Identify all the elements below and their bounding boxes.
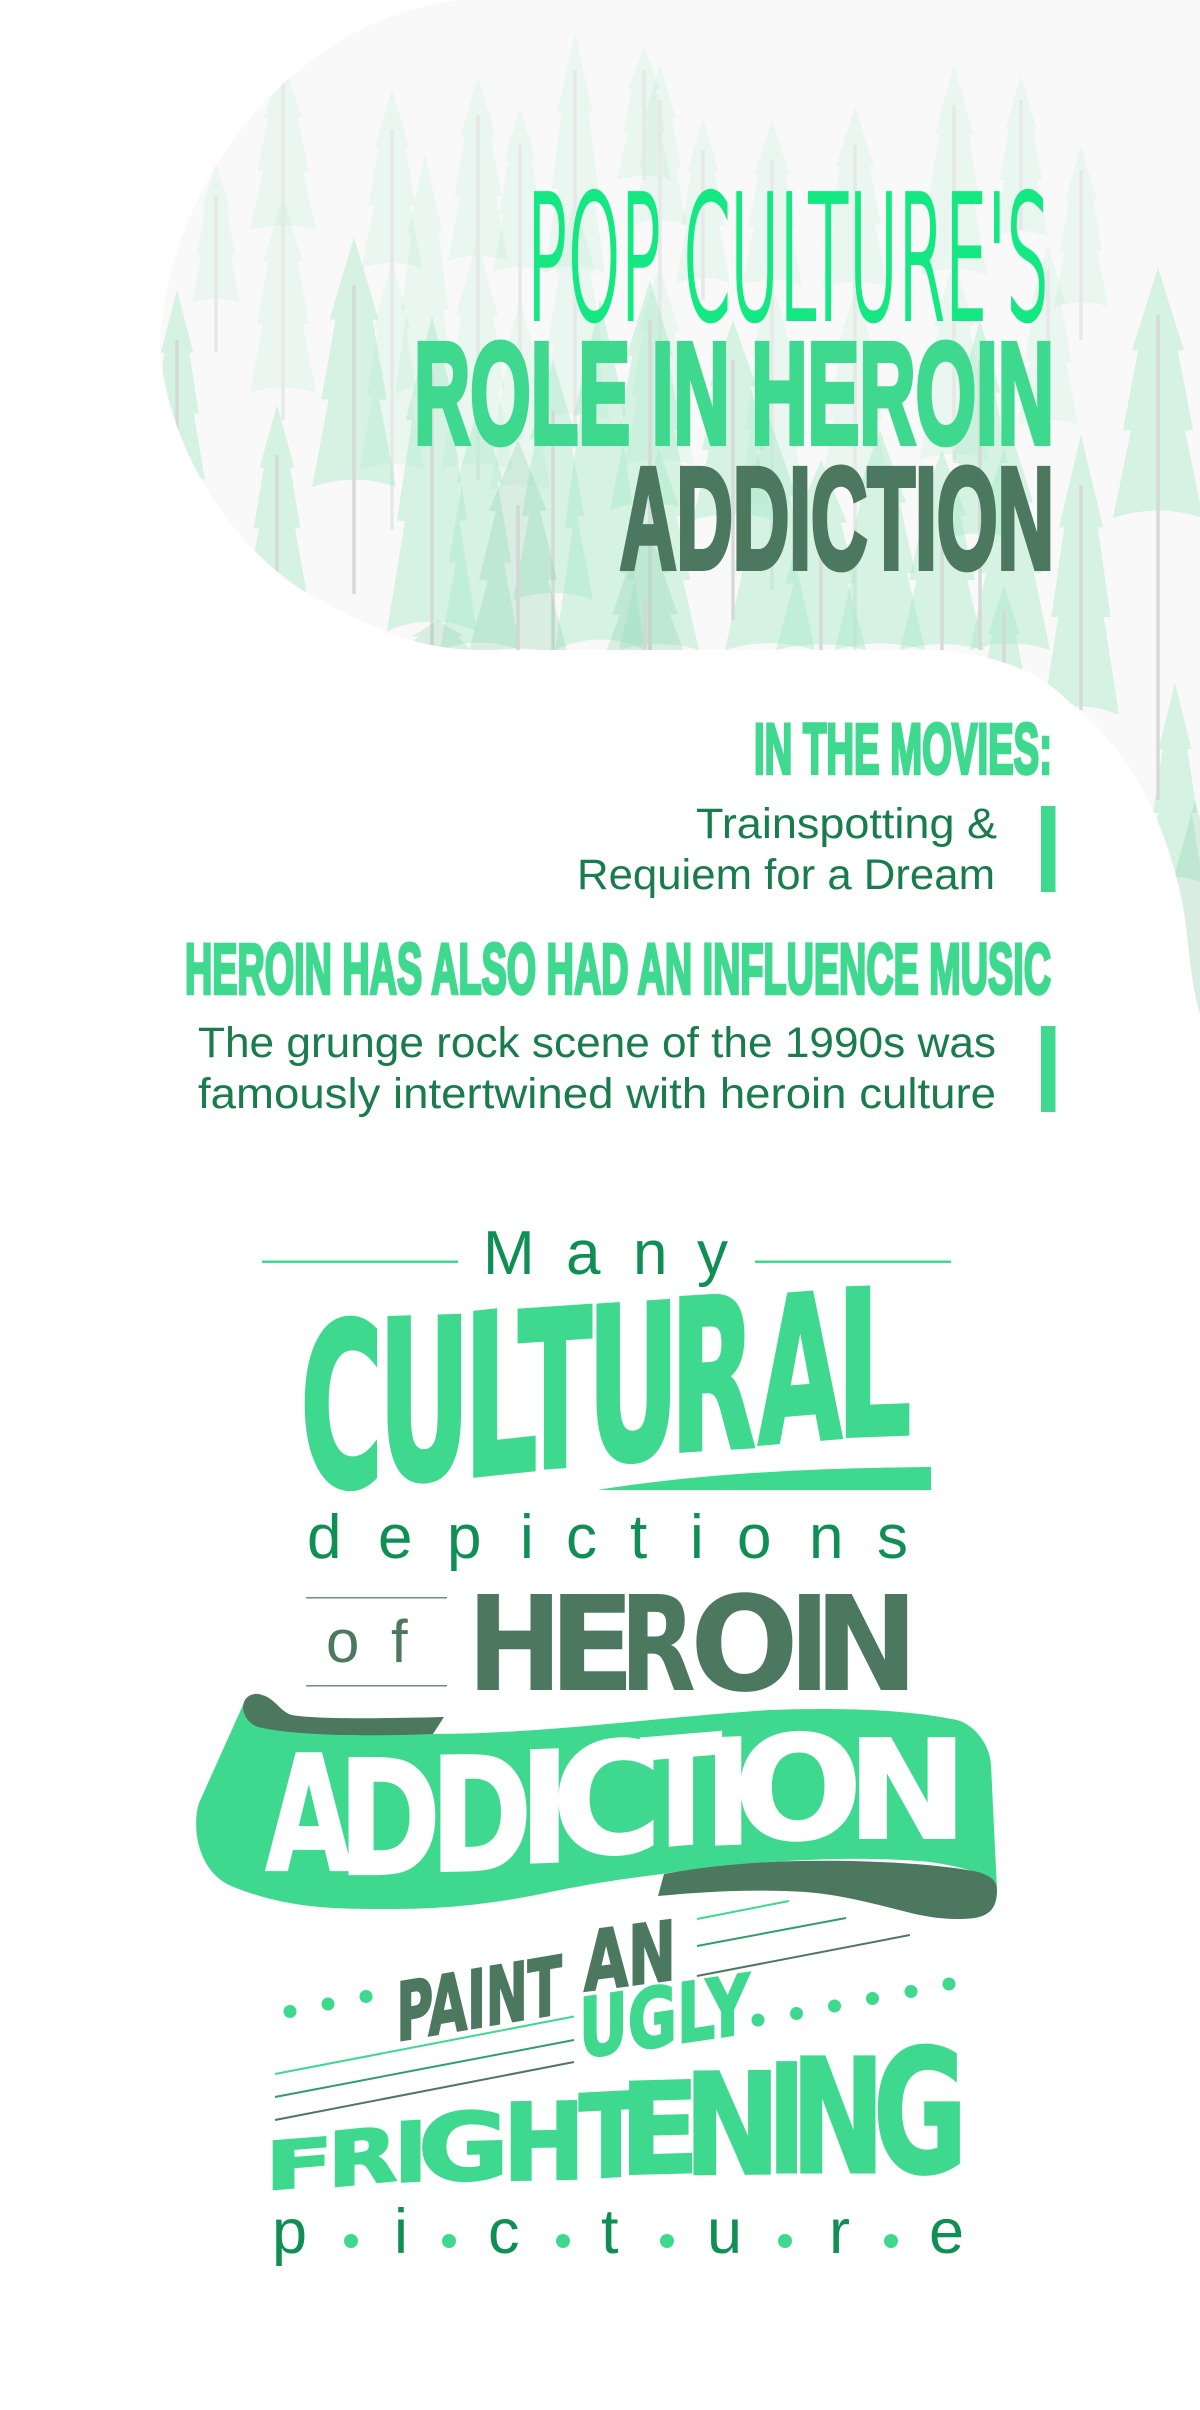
word: HEROIN: H (467, 1569, 562, 1722)
trees: darker front row (393, 440, 1200, 1060)
word: CULTURAL warped lettering: A (758, 1251, 842, 1493)
word: FRIGHTENING warped lettering (265, 2015, 967, 2213)
word: HEROIN: R (620, 1569, 696, 1722)
word: CULTURAL warped lettering: L (836, 1247, 912, 1485)
word: CULTURAL warped lettering: T (518, 1262, 592, 1521)
diagonal lines: lower left (275, 2016, 574, 2120)
dots: left (284, 1990, 372, 2018)
words: PAINT AN: PAINT (396, 1939, 562, 2060)
word: CULTURAL warped lettering: C (300, 1276, 383, 1540)
dots: right (752, 1978, 956, 2026)
word: ADDICTION: T (640, 1703, 722, 1884)
word: HEROIN (467, 1567, 919, 1722)
word: HEROIN: I (789, 1567, 830, 1721)
word: CULTURAL warped lettering: L (464, 1262, 538, 1531)
word: FRIGHTENING warped lettering: G (873, 2015, 967, 2213)
words: PAINT AN (396, 1903, 676, 2060)
word: FRIGHTENING warped lettering: E (620, 2055, 699, 2204)
word: HEROIN: N (814, 1569, 919, 1722)
word: FRIGHTENING warped lettering: F (265, 2124, 333, 2206)
panel: forest header background (149, 0, 1200, 1060)
trees: pale back row (192, 33, 1108, 510)
word: FRIGHTENING warped lettering: H (503, 2081, 585, 2206)
text block: movies: Requiem for a Dream (577, 851, 995, 899)
word: FRIGHTENING warped lettering: T (579, 2067, 643, 2205)
accent bar: music (1041, 1026, 1056, 1112)
text block: movies (577, 800, 997, 899)
text block: music: The grunge rock scene of the 1990s was (198, 1019, 996, 1067)
words: PAINT AN: AN (584, 1903, 676, 2011)
text block: music: famously intertwined with heroin culture (198, 1070, 996, 1118)
word: depictions: depictions (307, 1503, 908, 1572)
swoosh under CULTURAL (598, 1467, 931, 1490)
word: ADDICTION: N (847, 1712, 968, 1871)
word: ADDICTION: I (518, 1718, 571, 1899)
word: CULTURAL warped lettering (300, 1247, 912, 1540)
word: ADDICTION: C (552, 1708, 662, 1892)
word: Many with side rules: Many (483, 1219, 728, 1288)
word: FRIGHTENING warped lettering: I (394, 2105, 427, 2202)
title (414, 161, 1054, 599)
word: FRIGHTENING warped lettering: G (418, 2093, 509, 2204)
text block: movies: Trainspotting & (696, 800, 997, 848)
word: FRIGHTENING warped lettering: N (791, 2027, 885, 2210)
word: ADDICTION: A (266, 1722, 352, 1908)
word: CULTURAL warped lettering: U (378, 1271, 471, 1533)
word: HEROIN: O (690, 1567, 799, 1721)
word: ADDICTION: O (734, 1704, 862, 1874)
word: ADDICTION (266, 1703, 968, 1912)
diagonal lines: upper right (697, 1901, 910, 1976)
word: ADDICTION: I (704, 1708, 752, 1880)
word: of with rules: of (326, 1608, 408, 1675)
word: CULTURAL warped lettering: U (587, 1259, 680, 1513)
ribbon banner with ADDICTION (196, 1694, 997, 1919)
word: UGLY: UGLY (579, 1957, 750, 2078)
word: ADDICTION: D (430, 1724, 532, 1909)
word: FRIGHTENING warped lettering: R (328, 2111, 397, 2205)
word: HEROIN: E (549, 1568, 635, 1722)
accent bar: movies (1041, 806, 1056, 892)
word: FRIGHTENING warped lettering: N (684, 2044, 780, 2208)
word: ADDICTION: D (338, 1727, 441, 1912)
word: picture with dots: picture (272, 2197, 964, 2267)
word: CULTURAL warped lettering: R (670, 1252, 756, 1501)
word: FRIGHTENING warped lettering: I (768, 2034, 805, 2208)
trees: middle row (149, 237, 1200, 883)
text block: music (198, 1019, 996, 1118)
